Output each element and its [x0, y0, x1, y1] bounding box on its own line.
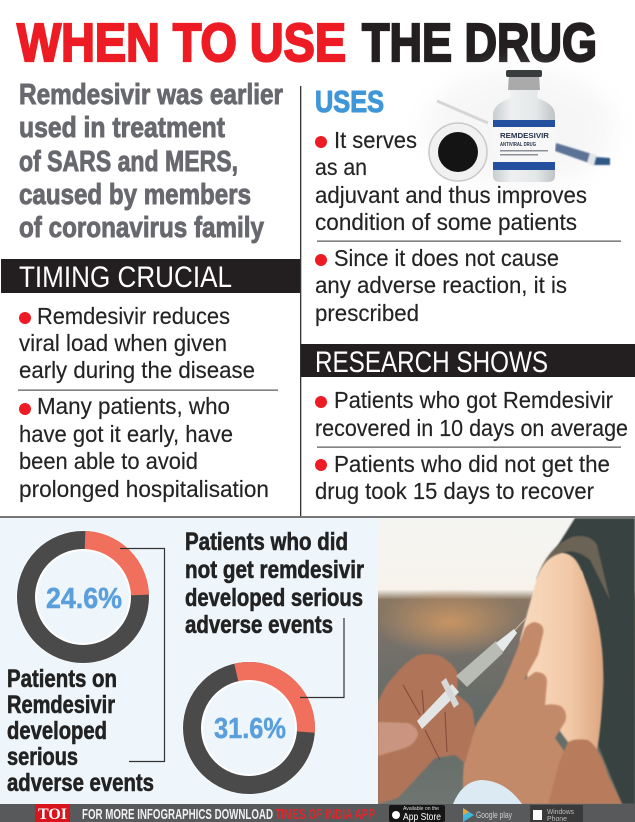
badge: google play: Google play	[476, 810, 512, 821]
bullet: reduces viral load: Remdesivir reduces	[37, 303, 230, 329]
bullet: avoid hospitalisation: have got it early, have	[19, 421, 233, 447]
title	[17, 13, 597, 73]
footer bar	[0, 804, 635, 822]
bullet: reduces viral load: viral load when given	[19, 330, 227, 356]
bullet: reduces viral load: early during the disease	[19, 357, 255, 383]
bullet: 15 days: Patients who did not get the	[334, 451, 610, 477]
bullet: no adverse reaction: any adverse reaction, it is	[315, 272, 567, 298]
badge: app store: Available on the	[403, 806, 439, 812]
image: remdesivir vial: REMDESIVIR	[500, 131, 550, 140]
bullet: adjuvant: It serves	[334, 127, 417, 153]
image: injection photo	[375, 518, 635, 804]
panel: donut charts	[0, 516, 635, 804]
donut chart: 24.6%	[16, 530, 150, 664]
bullet: 10 days: Patients who got Remdesivir	[334, 387, 613, 413]
bullet: no adverse reaction: Since it does not cause	[334, 245, 559, 271]
badge: windows phone	[530, 805, 583, 822]
bullet: avoid hospitalisation	[19, 393, 269, 502]
bullet: avoid hospitalisation: Many patients, who	[37, 393, 230, 419]
label: patients on remdesivir: adverse events	[7, 769, 154, 797]
image: remdesivir vial	[425, 70, 615, 186]
label: patients without remdesivir	[185, 528, 364, 639]
label: patients without remdesivir: developed serious	[185, 584, 363, 612]
leader line: left donut	[120, 548, 164, 762]
bullet: 15 days: drug took 15 days to recover	[315, 478, 594, 504]
panel: research shows	[301, 344, 635, 504]
bullet: adjuvant: as an	[315, 154, 367, 180]
label: patients without remdesivir: not get remdesivir	[185, 556, 364, 584]
heading: research shows: RESEARCH SHOWS	[315, 346, 548, 379]
label: patients without remdesivir: Patients who did	[185, 528, 348, 556]
intro text block: of SARS and MERS,	[19, 146, 238, 178]
heading: timing crucial: TIMING CRUCIAL	[19, 261, 232, 294]
intro text block	[19, 79, 283, 244]
syringe	[417, 618, 526, 729]
label: patients on remdesivir: Remdesivir	[7, 691, 115, 719]
bullet: adjuvant: condition of some patients	[315, 209, 577, 235]
intro text block: Remdesivir was earlier	[19, 79, 283, 111]
panel: uses	[315, 84, 621, 326]
leader line: right donut	[300, 618, 344, 698]
bullet: reduces viral load	[19, 303, 255, 383]
bullet: adjuvant: adjuvant and thus improves	[315, 182, 587, 208]
label: patients without remdesivir: adverse events	[185, 611, 333, 639]
label: patients on remdesivir	[7, 665, 154, 797]
label: patients on remdesivir: developed	[7, 717, 107, 745]
badge: windows phone: Windows	[547, 807, 574, 816]
intro text block: of coronavirus family	[19, 212, 264, 244]
label: patients on remdesivir: serious	[7, 743, 78, 771]
badge: google play	[463, 808, 512, 822]
bullet: avoid hospitalisation: prolonged hospitalisation	[19, 476, 269, 502]
bullet: adjuvant	[315, 127, 587, 235]
donut chart: 31.6%: 31.6%	[214, 713, 286, 745]
bullet: avoid hospitalisation: been able to avoid	[19, 448, 198, 474]
bullet: 10 days	[315, 387, 628, 441]
intro text block: used in treatment	[19, 112, 225, 144]
bullet: no adverse reaction: prescribed	[315, 300, 419, 326]
donut chart: 24.6%: 24.6%	[46, 583, 122, 615]
bullet: no adverse reaction	[315, 245, 567, 326]
column divider	[300, 86, 301, 516]
heading: uses: USES	[315, 84, 384, 119]
intro text block: caused by members	[19, 179, 251, 211]
title: WHEN TO USE	[17, 13, 346, 73]
donut chart: 31.6%	[182, 662, 316, 794]
label: patients on remdesivir: Patients on	[7, 665, 117, 693]
bullet: 15 days	[315, 451, 610, 504]
panel: timing crucial	[1, 259, 300, 502]
badge: app store	[389, 805, 445, 822]
image: remdesivir vial: ANTIVIRAL DRUG	[500, 142, 536, 148]
